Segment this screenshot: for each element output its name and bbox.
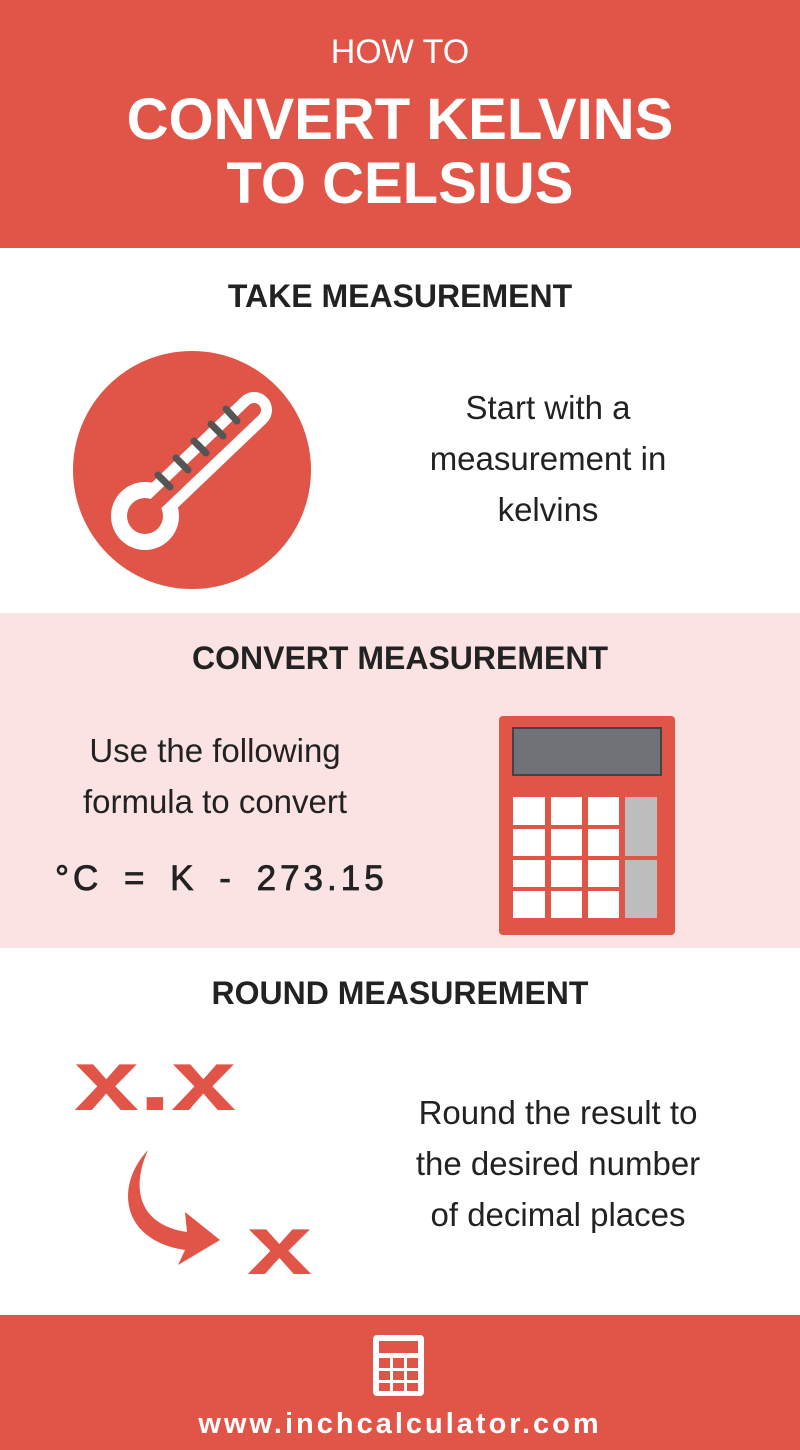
- icon: thermometer: [73, 351, 311, 589]
- text: round result: [416, 1094, 700, 1233]
- text: formula intro: [83, 732, 347, 820]
- icon: footer calculator: [373, 1335, 424, 1396]
- icon: calculator: [499, 716, 675, 935]
- header banner: [0, 0, 800, 248]
- panel: convert: [0, 613, 800, 948]
- text: start with measurement: Start with a: [465, 389, 631, 426]
- heading: round measurement: ROUND MEASUREMENT: [212, 975, 588, 1011]
- title: CONVERT KELVINS: [127, 87, 673, 152]
- icon: rounding x.x to x: [74, 1050, 312, 1280]
- heading: convert measurement: CONVERT MEASUREMENT: [192, 640, 608, 676]
- text: formula intro: Use the following: [89, 732, 341, 769]
- formula: °C = K - 273.15: [55, 859, 388, 898]
- title: TO CELSIUS: [226, 151, 573, 216]
- text: formula intro: formula to convert: [83, 783, 347, 820]
- footer: [0, 1315, 800, 1450]
- text: round result: of decimal places: [431, 1196, 685, 1233]
- subtitle: HOW TO: [331, 33, 469, 71]
- text: start with measurement: kelvins: [498, 491, 598, 528]
- text: round result: the desired number: [416, 1145, 700, 1182]
- text: round result: Round the result to: [419, 1094, 697, 1131]
- heading: take measurement: TAKE MEASUREMENT: [228, 278, 572, 314]
- footer url: www.inchcalculator.com: [198, 1408, 602, 1440]
- title: [127, 87, 673, 216]
- text: start with measurement: [430, 389, 666, 528]
- text: start with measurement: measurement in: [430, 440, 666, 477]
